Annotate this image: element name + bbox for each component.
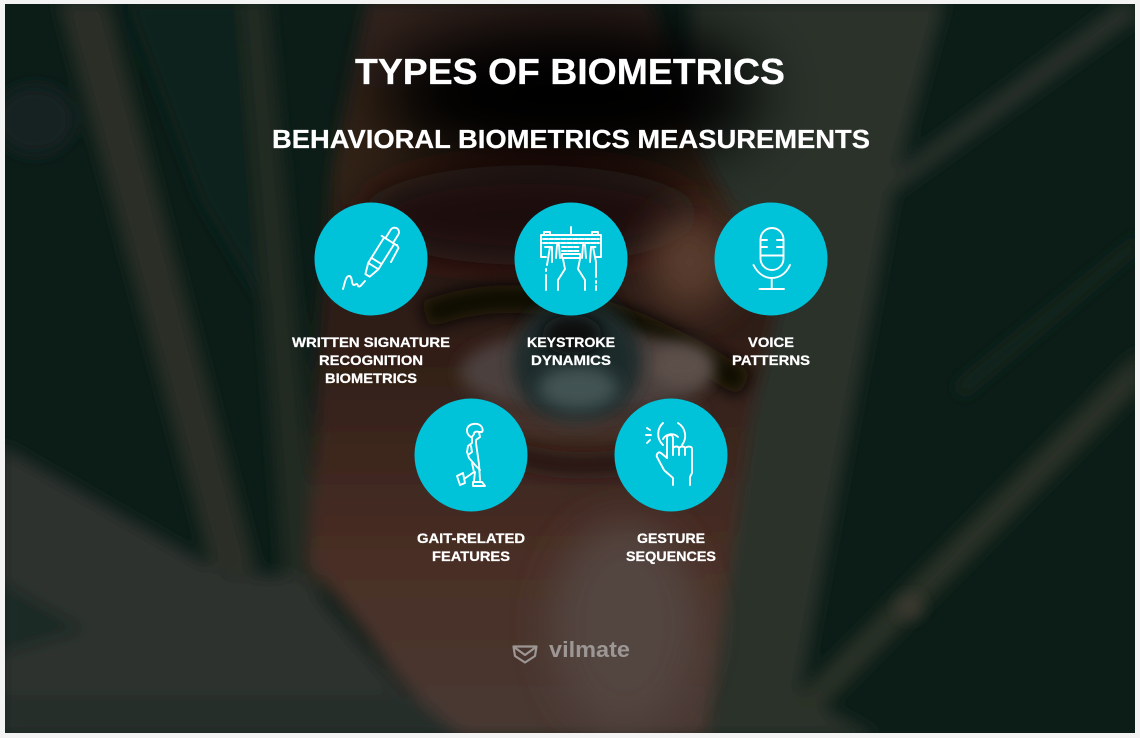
label: KEYSTROKE	[527, 334, 615, 350]
item: voice patterns	[714, 202, 828, 368]
wordmark: vilmate	[549, 637, 630, 662]
item: keystroke dynamics	[514, 202, 628, 368]
label: GAIT-RELATED	[417, 530, 525, 546]
icon: walking person	[414, 398, 528, 512]
label: GESTURE	[637, 530, 705, 546]
icon: hands on keyboard	[514, 202, 628, 316]
icon: pen signing	[314, 202, 428, 316]
label: RECOGNITION	[319, 352, 423, 368]
eyebrow shadow	[360, 165, 700, 265]
label	[417, 530, 525, 564]
subtitle: BEHAVIORAL BIOMETRICS MEASUREMENTS	[272, 124, 870, 154]
label: SEQUENCES	[626, 548, 716, 564]
icon: envelope mark	[514, 646, 536, 662]
label: VOICE	[748, 334, 794, 350]
icon: microphone	[714, 202, 828, 316]
label	[732, 334, 810, 368]
icon: tapping finger	[614, 398, 728, 512]
label	[626, 530, 716, 564]
item: gesture sequences	[614, 398, 728, 564]
leaf highlight	[898, 596, 922, 618]
label	[527, 334, 615, 368]
item: written signature	[292, 202, 450, 386]
title: TYPES OF BIOMETRICS	[355, 51, 785, 92]
label: PATTERNS	[732, 352, 810, 368]
label	[292, 334, 450, 386]
warm skin	[648, 214, 732, 310]
dark top of face behind title	[380, 20, 760, 170]
eye	[425, 298, 745, 465]
label: DYNAMICS	[531, 352, 611, 368]
item: gait-related features	[414, 398, 528, 564]
label: BIOMETRICS	[325, 370, 417, 386]
label: WRITTEN SIGNATURE	[292, 334, 450, 350]
label: FEATURES	[432, 548, 510, 564]
logo: vilmate	[514, 637, 630, 662]
